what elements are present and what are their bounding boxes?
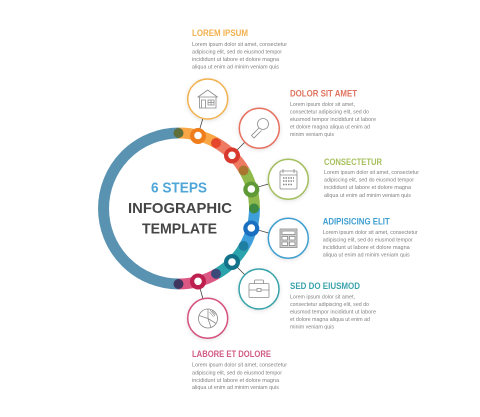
icon: briefcase <box>249 280 269 298</box>
text block: consectetur: incididunt ut labore et dolore magna <box>324 185 412 191</box>
text block: labore et dolore: Lorem ipsum dolor sit amet, consectetur <box>192 363 287 369</box>
text block: lorem ipsum: aliqua ut enim ad minim veniam quis <box>192 64 279 70</box>
text block: labore et dolore: aliqua ut enim ad minim veniam quis <box>192 385 279 391</box>
text block: adipisicing elit: incididunt ut labore et dolore magna <box>323 245 411 251</box>
ring: pink segment <box>179 274 217 284</box>
main ring diagram <box>104 118 268 299</box>
text block: sed do eiusmod: Lorem ipsum dolor sit amet, <box>290 295 355 301</box>
text block: dolor sit amet <box>290 88 376 138</box>
center title: TEMPLATE <box>142 220 217 238</box>
step 4: circle with calculator icon <box>268 218 308 258</box>
text block: labore et dolore: adipiscing elit, sed do eiusmod tempor <box>192 370 282 376</box>
icon: magnifier <box>252 118 268 138</box>
text block: lorem ipsum: incididunt ut labore et dolore magna <box>192 57 280 63</box>
text block: lorem ipsum <box>192 28 287 70</box>
overlap dots <box>174 128 259 289</box>
icon: house <box>198 90 217 108</box>
text block: consectetur: CONSECTETUR <box>324 157 382 167</box>
text block: consectetur: adipiscing elit, sed do eiusmod tempor <box>324 178 414 184</box>
ring: blue left arc <box>104 133 179 284</box>
text block: lorem ipsum: LOREM IPSUM <box>192 28 248 38</box>
step 5: circle with briefcase icon <box>239 269 279 309</box>
text block: dolor sit amet: eiusmod tempor incididunt ut labore <box>290 117 376 123</box>
text block: sed do eiusmod: eiusmod tempor incididunt ut labore <box>290 310 376 316</box>
center title <box>128 180 232 238</box>
text block: adipisicing elit: aliqua ut enim ad minim veniam quis <box>323 252 410 258</box>
step nodes <box>190 128 259 290</box>
icon: calendar <box>280 169 297 189</box>
text block: sed do eiusmod: minim veniam quis <box>290 325 334 331</box>
ring: green segment <box>244 171 254 208</box>
step 2: circle with magnifier icon <box>239 108 279 148</box>
text block: labore et dolore <box>192 349 287 391</box>
text block: adipisicing elit: ADIPISICING ELIT <box>323 216 390 226</box>
text block: dolor sit amet: consectetur adipiscing elit, sed do <box>290 110 369 116</box>
ring: blue segment <box>244 208 254 246</box>
step 3: circle with calendar icon <box>268 159 308 199</box>
text block: labore et dolore: LABORE ET DOLORE <box>192 349 271 359</box>
text block: lorem ipsum: adipiscing elit, sed do eiusmod tempor <box>192 50 282 56</box>
text block: dolor sit amet: DOLOR SIT AMET <box>290 88 357 98</box>
ring: coral segment <box>217 143 244 171</box>
ring: orange segment <box>179 133 217 143</box>
icon: calculator <box>280 229 297 248</box>
text block: consectetur: aliqua ut enim ad minim veniam quis <box>324 193 411 199</box>
text block: sed do eiusmod: consectetur adipiscing elit, sed do <box>290 302 369 308</box>
text block: adipisicing elit: adipiscing elit, sed do eiusmod tempor <box>323 238 413 244</box>
center title: 6 STEPS <box>151 180 207 196</box>
text block: adipisicing elit <box>323 216 418 258</box>
text block: adipisicing elit: Lorem ipsum dolor sit amet, consectetur <box>323 230 418 236</box>
step 1: circle with house icon <box>188 79 228 119</box>
text block: sed do eiusmod: SED DO EIUSMOD <box>290 281 360 291</box>
text block: sed do eiusmod: et dolore magna aliqua ut enim ad <box>290 317 370 323</box>
text block: dolor sit amet: minim veniam quis <box>290 132 334 138</box>
text block: sed do eiusmod <box>290 281 376 331</box>
text block: dolor sit amet: et dolore magna aliqua ut enim ad <box>290 124 370 130</box>
icon: pie chart <box>198 309 218 328</box>
text block: labore et dolore: incididunt ut labore et dolore magna <box>192 378 280 384</box>
text block: consectetur: Lorem ipsum dolor sit amet, consectetur <box>324 170 419 176</box>
text block: dolor sit amet: Lorem ipsum dolor sit amet, <box>290 102 355 108</box>
step 6: circle with pie chart icon <box>188 298 228 338</box>
ring: teal segment <box>217 246 244 274</box>
connector lines <box>198 118 268 299</box>
center title: INFOGRAPHIC <box>128 200 232 217</box>
text block: lorem ipsum: Lorem ipsum dolor sit amet, consectetur <box>192 42 287 48</box>
text block: consectetur <box>324 157 419 199</box>
